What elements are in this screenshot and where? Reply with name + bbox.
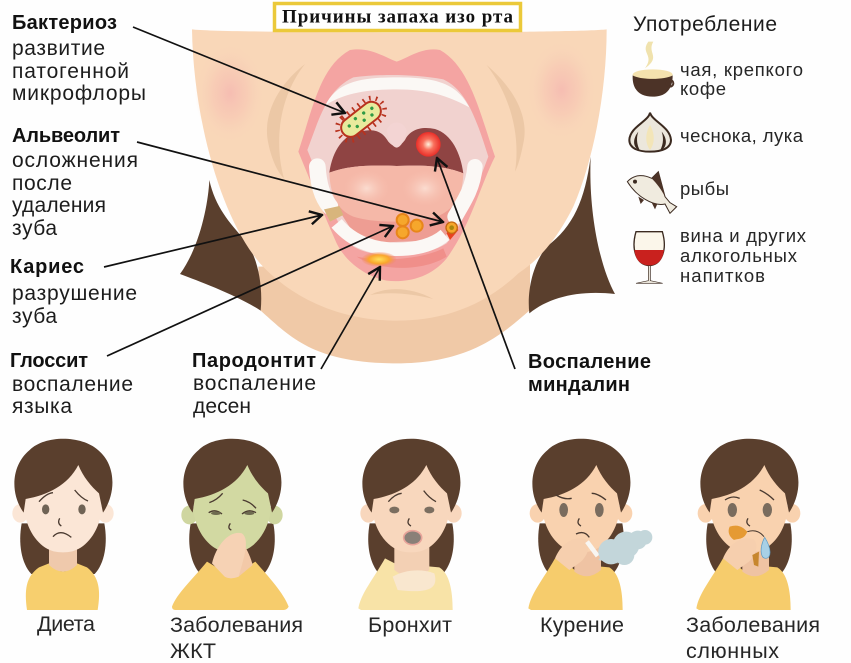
caption: bronchitis: Бронхит bbox=[368, 613, 452, 637]
heading: consumption: Употребление bbox=[633, 13, 777, 36]
label: caries: разрушение bbox=[12, 282, 137, 305]
title: Причины запаха изо рта bbox=[282, 6, 514, 28]
label: bacteriosis: патогенной bbox=[12, 60, 129, 83]
inflamed tonsil bbox=[416, 132, 441, 157]
mouth interior bbox=[307, 75, 488, 256]
label: alveolitis: осложнения bbox=[12, 149, 138, 172]
label: alveolitis: зуба bbox=[12, 217, 57, 240]
label: tonsillitis: миндалин bbox=[528, 374, 630, 396]
arrow: alveolitis bbox=[137, 142, 443, 222]
alveolitis spot bbox=[446, 222, 458, 240]
upper teeth bbox=[325, 77, 469, 107]
icon: wine glass bbox=[634, 232, 664, 283]
face bbox=[192, 29, 607, 321]
arrow: periodontitis bbox=[321, 267, 380, 369]
text: wine and alcohol: алкогольных bbox=[680, 245, 798, 266]
arrow: glossitis bbox=[107, 226, 393, 356]
caption: diet: Диета bbox=[37, 612, 95, 636]
arrow: tonsils bbox=[437, 158, 515, 369]
smile line left bbox=[267, 64, 305, 178]
hair right bbox=[529, 157, 615, 313]
icon: garlic bbox=[629, 113, 671, 152]
uvula bbox=[387, 122, 407, 148]
label: glossitis: воспаление bbox=[12, 373, 133, 396]
label: glossitis: Глоссит bbox=[10, 350, 88, 372]
text: fish: рыбы bbox=[680, 178, 729, 199]
label: bacteriosis: Бактериоз bbox=[12, 12, 117, 34]
text: tea, coffee: кофе bbox=[680, 78, 726, 99]
caption: salivary disease bbox=[686, 613, 820, 663]
caption: digestive disease bbox=[170, 613, 303, 663]
girl: salivary disease bbox=[696, 439, 800, 610]
lips bbox=[298, 49, 495, 281]
icon: coffee cup bbox=[633, 42, 673, 97]
arrow: caries bbox=[104, 215, 322, 267]
text: wine and alcohol bbox=[680, 225, 807, 286]
chin crease bbox=[370, 289, 433, 299]
smile line right bbox=[487, 65, 525, 172]
tongue highlight right bbox=[402, 170, 448, 207]
text: wine and alcohol: напитков bbox=[680, 265, 765, 286]
label: periodontitis: Пародонтит bbox=[192, 350, 316, 372]
label: periodontitis: десен bbox=[193, 395, 251, 418]
caption: salivary disease: Заболевания bbox=[686, 613, 820, 637]
label: caries: Кариес bbox=[10, 256, 84, 278]
hair left bbox=[180, 180, 261, 311]
caption: digestive disease: Заболевания bbox=[170, 613, 303, 637]
label: caries bbox=[10, 256, 137, 328]
illustration: lower face and open mouth bbox=[180, 29, 615, 363]
lower gum line bbox=[357, 248, 447, 268]
label: alveolitis: удаления bbox=[12, 194, 106, 217]
tongue highlight left bbox=[343, 170, 390, 207]
label: glossitis bbox=[10, 350, 133, 418]
girl: smoking bbox=[528, 439, 652, 610]
label: caries: зуба bbox=[12, 305, 57, 328]
label: alveolitis: Альвеолит bbox=[12, 125, 120, 147]
caption: smoking: Курение bbox=[540, 613, 624, 637]
label: bacteriosis: развитие bbox=[12, 37, 105, 60]
text: wine and alcohol: вина и других bbox=[680, 225, 807, 246]
lower teeth bbox=[337, 223, 445, 249]
periodontitis spot bbox=[362, 252, 396, 267]
arrows bbox=[104, 27, 515, 369]
right side teeth bbox=[455, 167, 475, 217]
tongue bbox=[329, 166, 463, 222]
label: tonsillitis bbox=[528, 351, 651, 396]
label: bacteriosis: микрофлоры bbox=[12, 82, 146, 105]
text: garlic, onion: чеснока, лука bbox=[680, 125, 804, 146]
label: tonsillitis: Воспаление bbox=[528, 351, 651, 373]
caption: digestive disease: ЖКТ bbox=[170, 639, 216, 663]
cheek blush left bbox=[195, 43, 265, 143]
decayed tooth bbox=[324, 206, 343, 222]
label: periodontitis: воспаление bbox=[193, 372, 316, 395]
glossitis spots bbox=[397, 214, 423, 238]
text: tea, coffee: чая, крепкого bbox=[680, 59, 803, 80]
text: tea, coffee bbox=[680, 59, 803, 99]
label: alveolitis bbox=[12, 125, 138, 240]
bacterium bbox=[332, 93, 390, 146]
caption: salivary disease: слюнных bbox=[686, 639, 779, 663]
neck bbox=[258, 260, 530, 363]
label: bacteriosis bbox=[12, 12, 146, 105]
girl: bronchitis bbox=[358, 439, 462, 610]
throat bbox=[329, 128, 463, 173]
icon: fish bbox=[627, 172, 677, 213]
cheek blush right bbox=[527, 40, 597, 140]
girl: digestive disease bbox=[172, 439, 289, 610]
girl: diet bbox=[12, 439, 114, 610]
floor of mouth bbox=[330, 173, 463, 243]
left side teeth bbox=[317, 167, 330, 207]
label: glossitis: языка bbox=[12, 395, 72, 418]
arrow: bacteriosis bbox=[133, 27, 345, 113]
label: alveolitis: после bbox=[12, 172, 72, 195]
label: periodontitis bbox=[192, 350, 316, 418]
